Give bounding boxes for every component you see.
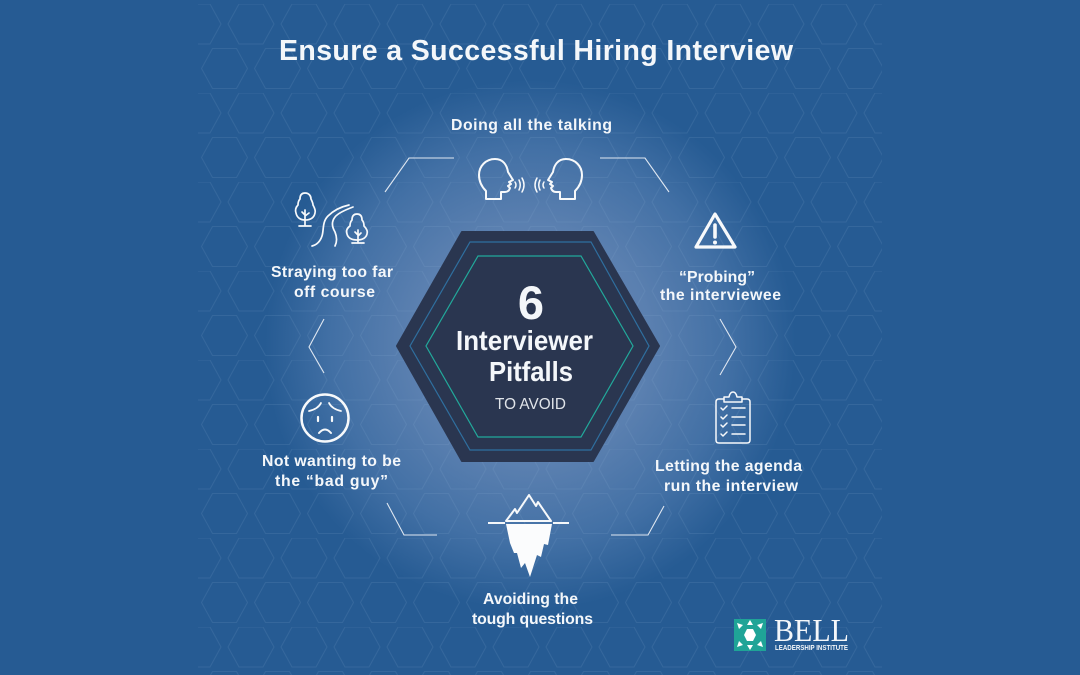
subheading: to avoid: TO AVOID: [495, 396, 566, 413]
label: not wanting to be the bad guy: the “bad guy”: [275, 473, 388, 490]
icon: iceberg: [488, 495, 569, 577]
label: not wanting to be the bad guy: [262, 453, 401, 490]
connector: bottom left: [387, 503, 437, 535]
label: straying too far off course: Straying too far: [271, 264, 393, 281]
label: letting the agenda run the interview: Letting the agenda: [655, 458, 802, 475]
label: doing all the talking: Doing all the talking: [451, 117, 612, 134]
title: Ensure a Successful Hiring Interview: [279, 35, 794, 67]
icon: clipboard checklist: [716, 392, 750, 443]
number 6: 6: [518, 276, 544, 329]
logo mark: [734, 619, 766, 651]
icon: trees and winding road: [296, 193, 367, 246]
label: letting the agenda run the interview: run the interview: [664, 478, 799, 495]
connector: bottom right: [611, 506, 664, 535]
connector: left: [309, 319, 324, 373]
icon: two talking heads: [479, 159, 582, 199]
logo: Bell Leadership Institute: [734, 612, 849, 652]
tagline: LEADERSHIP INSTITUTE: [775, 645, 848, 652]
wordmark: BELL: [774, 612, 849, 648]
label: avoiding the tough questions: [472, 591, 593, 628]
icon: warning triangle: [696, 214, 735, 247]
heading: Interviewer: Interviewer: [456, 325, 593, 356]
label: straying too far off course: off course: [294, 284, 375, 301]
heading: Pitfalls: Pitfalls: [489, 356, 573, 387]
connector: right: [720, 319, 736, 375]
central hexagon badge: [397, 232, 659, 461]
label: avoiding the tough questions: Avoiding the: [483, 591, 578, 608]
connector: top left: [385, 158, 454, 192]
icon: worried face: [302, 394, 348, 442]
label: probing the interviewee: “Probing”: [679, 269, 755, 286]
label: probing the interviewee: the interviewee: [660, 287, 781, 304]
label: avoiding the tough questions: tough questions: [472, 611, 593, 628]
connector: top right: [600, 158, 669, 192]
label: not wanting to be the bad guy: Not wanting to be: [262, 453, 401, 470]
label: letting the agenda run the interview: [655, 458, 802, 495]
label: straying too far off course: [271, 264, 393, 301]
label: probing the interviewee: [660, 269, 781, 304]
